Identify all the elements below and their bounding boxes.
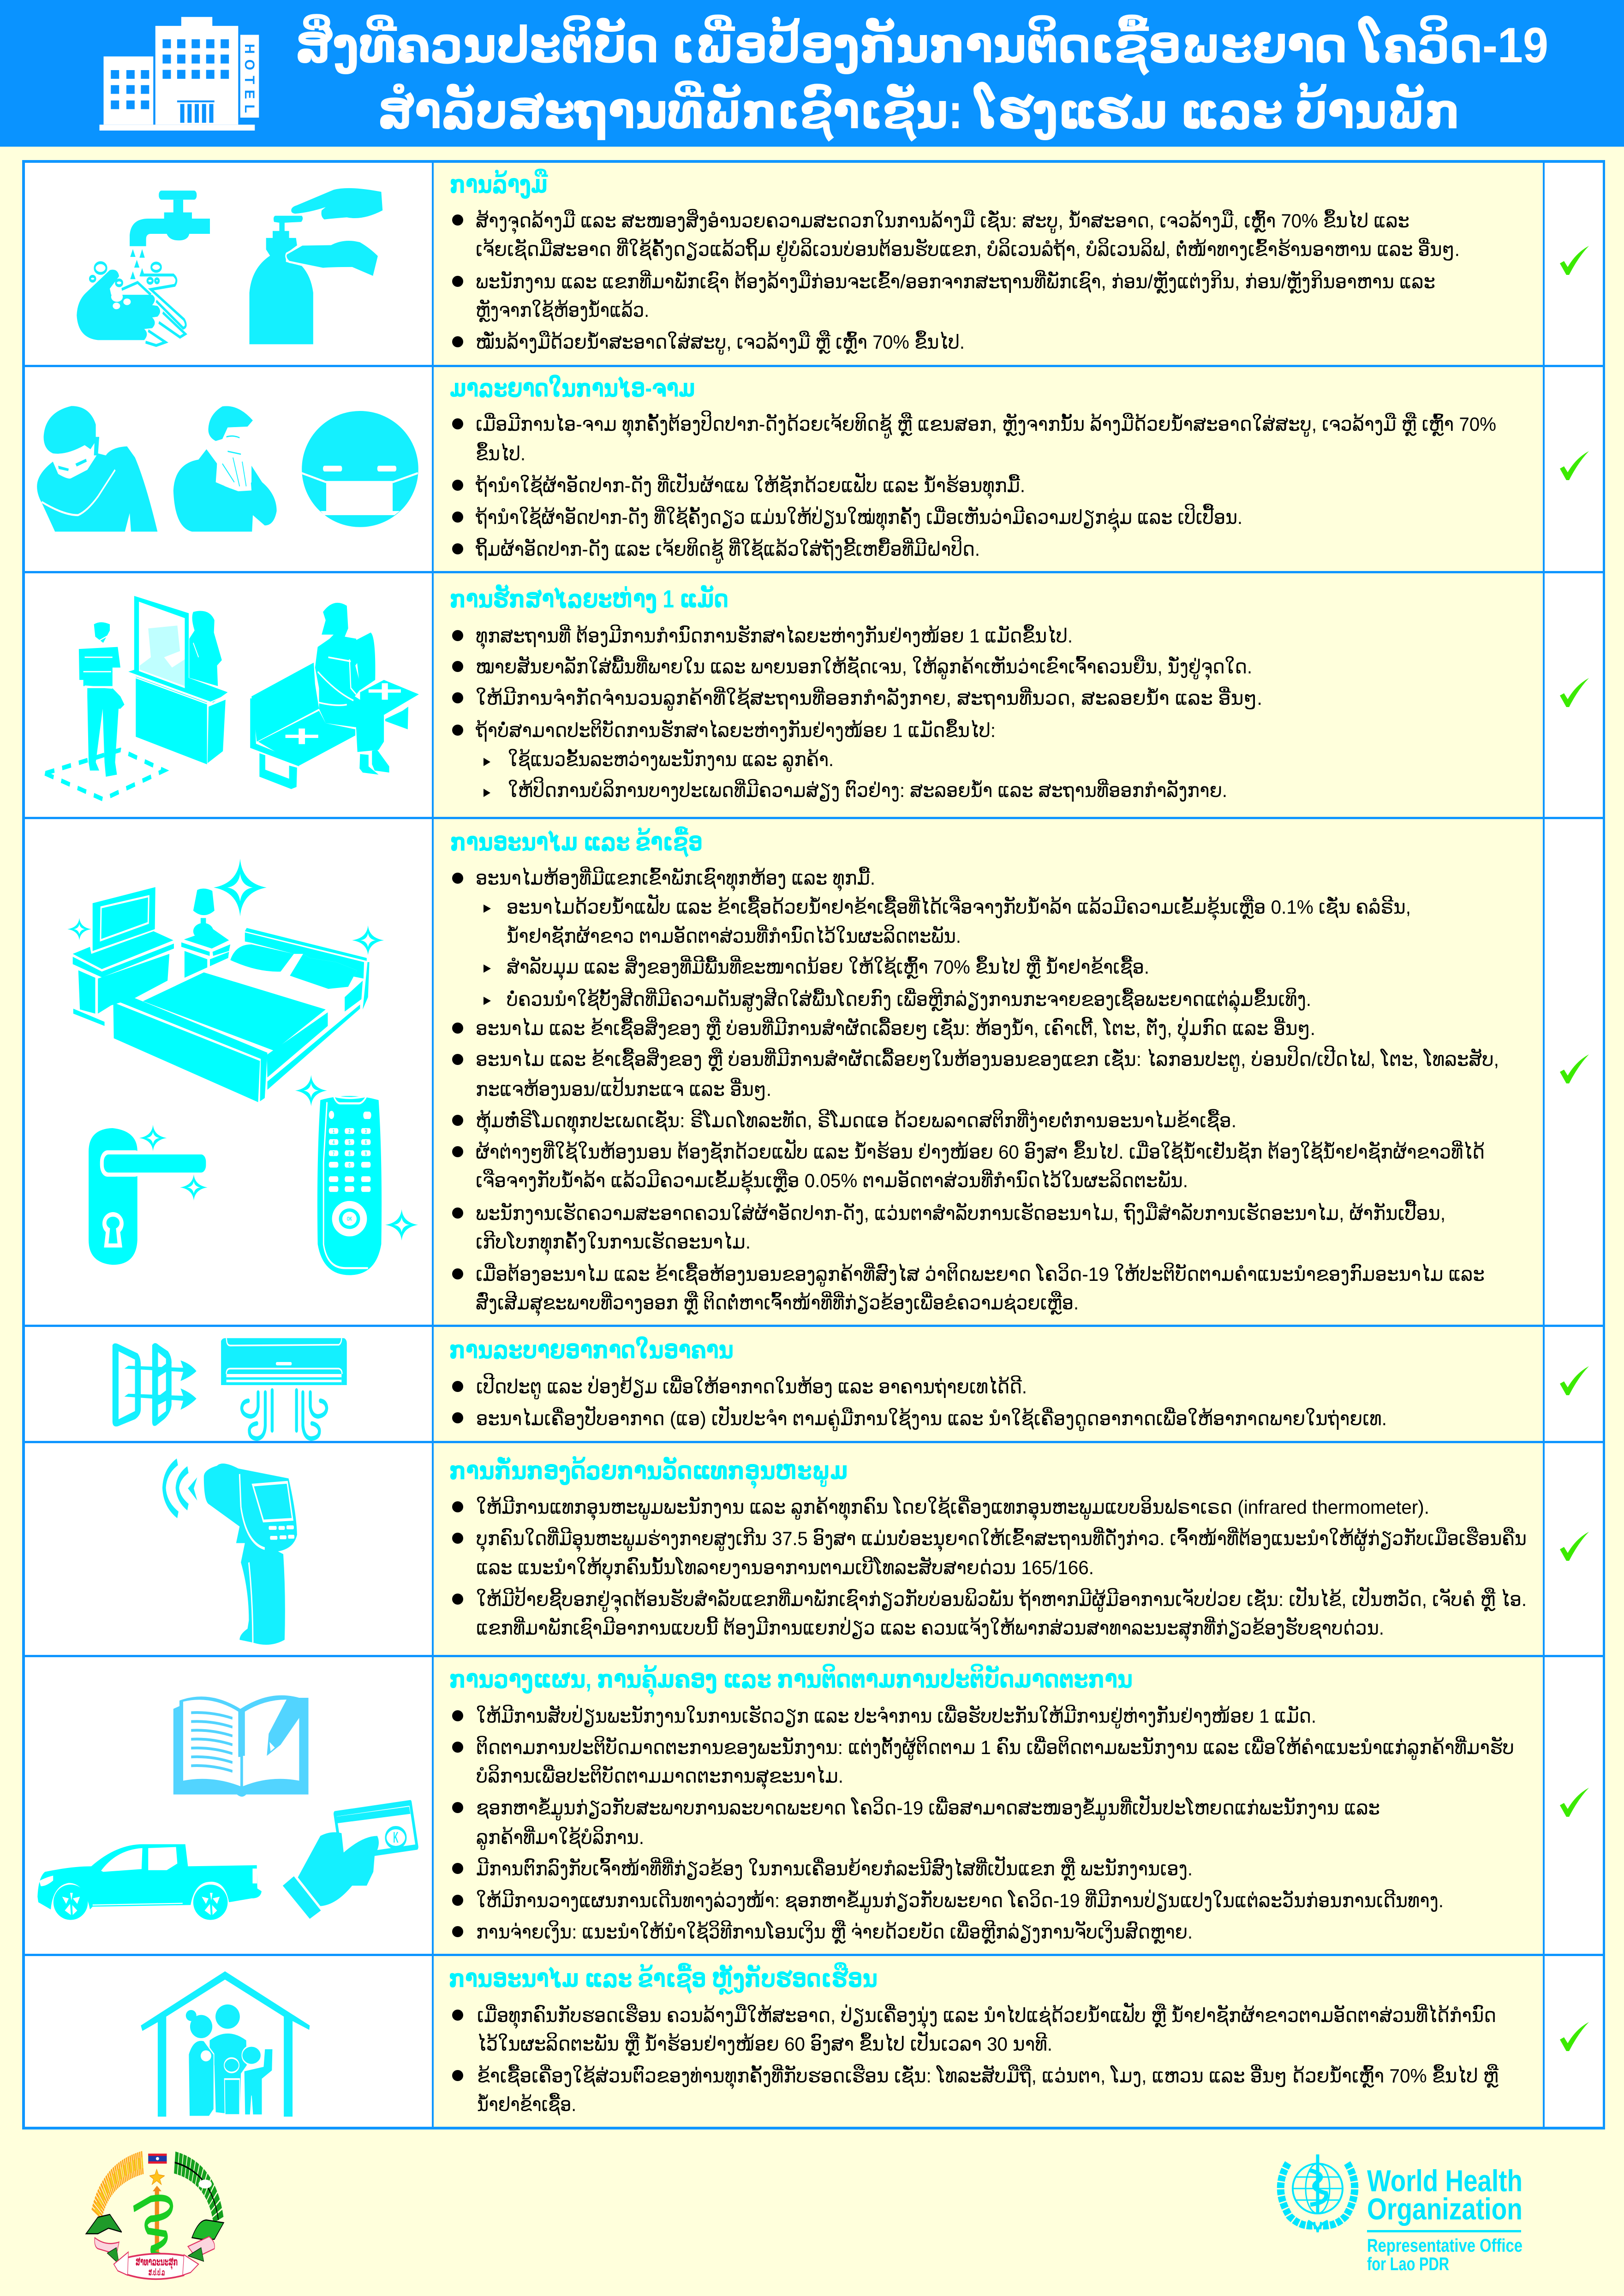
icon: check mark — [1560, 1788, 1589, 1817]
text block: ຖ້ານຳໃຊ້ຜ້າອັດປາກ-ດັງ ທີ່ເປັນຜ້າແພ ໃຫ້ຊັກດ້ວຍແຟັບ ແລະ ນ້ຳຮ້ອນທຸກມື້. — [475, 472, 1025, 500]
text block: ບໍລິການເພື່ອປະຕິບັດຕາມມາດຕະການສຸຂະນາໄມ. — [476, 1764, 843, 1790]
panel: cleaning and disinfection — [67, 827, 1589, 1317]
text: organisation name: Organization — [1367, 2192, 1522, 2226]
icon: check mark — [1560, 2022, 1589, 2051]
text block: ບໍ່ຄວນນຳໃຊ້ບັ້ງສີດທີ່ມີຄວາມດັນສູງສີດໃສ່ພື້ນໂດຍກົງ ເພື່ອຫຼີກລ່ຽງການກະຈາຍຂອງເຊື້ອພະຍາດແຕ່ລຸ່ມຂຶ້ນເທິງ. — [507, 987, 1311, 1013]
icon: book, pickup truck, card payment: K — [393, 1828, 399, 1846]
text block: ແຂກທີ່ມາພັກເຊົາມີອາການແບບນີ້ ຕ້ອງມີການແຍກປ່ຽວ ແລະ ຄວນແຈ້ງໃຫ້ພາກສ່ວນສາທາລະນະສຸກທີ່ກ່ຽວຂ້ອງຮັບຊາບດ່ວນ. — [476, 1617, 1384, 1642]
icon: family in house — [141, 1971, 310, 2117]
icon: check mark — [1560, 246, 1589, 275]
logo: World Health Organization — [1281, 2154, 1522, 2274]
text block: ເຈືອຈາງກັບນ້ຳລ້າ ແລ້ວມີຄວາມເຂັ້ມຂຸ້ນເຫຼືອ 0.05% ຕາມອັດຕາສ່ວນທີ່ກຳນົດໄວ້ໃນຜະລິດຕະພັນ. — [476, 1169, 1188, 1195]
icon: check mark — [1560, 451, 1589, 480]
icon: bed, door handle, remote: 5 — [348, 1140, 351, 1146]
panel: planning and monitoring — [37, 1664, 1589, 1944]
icon: infrared thermometer — [164, 1462, 297, 1645]
text block: ອະນາໄມ ແລະ ຂ້າເຊື້ອສິ່ງຂອງ ຫຼື ບ່ອນທີ່ມີການສຳຜັດເລື້ອຍໆໃນຫ້ອງນອນຂອງແຂກ ເຊັ່ນ: ໄລກອນປະຕູ, ບ່ອນປິດ/ເປີດໄຟ, ໂຕະ, ໂທລະສັບ, — [476, 1046, 1499, 1072]
text block: ໝາຍສັນຍາລັກໃສ່ພື້ນທີ່ພາຍໃນ ແລະ ພາຍນອກໃຫ້ຊັດເຈນ, ໃຫ້ລູກຄ້າເຫັນວ່າເຂົາເຈົ້າຄວນຍືນ, ນັ່ງຢູ່ຈຸດໃດ. — [476, 655, 1252, 681]
logo: Lao Ministry of Health emblem: ສາທາລະນະສຸກ — [136, 2255, 178, 2270]
text block: ກະແຈຫ້ອງນອນ/ແປ້ນກະແຈ ແລະ ອື່ນໆ. — [476, 1077, 771, 1100]
icon: bed, door handle, remote: OK — [347, 1216, 352, 1222]
icon: bed, door handle, remote: 6 — [365, 1140, 367, 1146]
text block: ເມື່ອມີການໄອ-ຈາມ ທຸກຄັ້ງຕ້ອງປິດປາກ-ດັງດ້ວຍເຈ້ຍທິດຊູ້ ຫຼື ແຂນສອກ, ຫຼັງຈາກນັ້ນ ລ້າງມືດ້ວຍນ້ຳສະອາດໃສ່ສະບູ, ເຈວລ້າງມື ຫຼື ເຫຼົ້າ 70% — [476, 410, 1496, 439]
icon: check mark — [1560, 678, 1589, 707]
text block — [452, 410, 1496, 564]
icon: bed, door handle, remote: 3 — [365, 1129, 367, 1135]
text block: ໝັ່ນລ້າງມືດ້ວຍນ້ຳສະອາດໃສ່ສະບູ, ເຈວລ້າງມື ຫຼື ເຫຼົ້າ 70% ຂຶ້ນໄປ. — [476, 330, 965, 355]
heading: ການຮັກສາໄລຍະຫ່າງ 1 ແມັດ — [450, 584, 728, 613]
text block — [452, 209, 1460, 355]
heading: ມາລະຍາດໃນການໄອ-ຈາມ — [450, 375, 695, 402]
text block: ຖ້າບໍ່ສາມາດປະຕິບັດການຮັກສາໄລຍະຫ່າງກັນຢ່າງໜ້ອຍ 1 ແມັດຂຶ້ນໄປ: — [475, 719, 996, 742]
text block: ຂ້າເຊື້ອເຄື່ອງໃຊ້ສ່ວນຕົວຂອງທ່ານທຸກຄັ້ງທີ່ກັບຮອດເຮືອນ ເຊັ່ນ: ໂທລະສັບມືຖື, ແວ່ນຕາ, ໂມງ, ແຫວນ ແລະ ອື່ນໆ ດ້ວຍນ້ຳເຫຼົ້າ 70% ຂຶ້ນໄປ ຫຼື — [477, 2064, 1499, 2090]
panel: cleaning after returning home — [141, 1963, 1589, 2117]
icon: check mark — [1560, 1532, 1589, 1561]
panel: cough etiquette — [37, 375, 1589, 564]
text block: ບຸກຄົນໃດທີ່ມີອຸນຫະພູມຮ່າງກາຍສູງເກີນ 37.5 ອົງສາ ແມ່ນບໍ່ອະນຸຍາດໃຫ້ເຂົ້າສະຖານທີ່ດັ່ງກ່າວ. ເຈົ້າໜ້າທີ່ຕ້ອງແນະນຳໃຫ້ຜູ້ກ່ຽວກັບເມືອເຮືອນຄືນ — [476, 1527, 1527, 1552]
icon: distancing at counter and bench — [45, 596, 419, 799]
panel: physical distance — [45, 584, 1589, 802]
text block: ພະນັກງານ ແລະ ແຂກທີ່ມາພັກເຊົາ ຕ້ອງລ້າງມືກ່ອນຈະເຂົ້າ/ອອກຈາກສະຖານທີ່ພັກເຊົາ, ກ່ອນ/ຫຼັງແຕ່ງກິນ, ກ່ອນ/ຫຼັງກິນອາຫານ ແລະ — [476, 270, 1435, 294]
text: organisation name: for Lao PDR — [1367, 2254, 1449, 2274]
text block — [452, 2002, 1499, 2116]
icon: hotel building — [100, 17, 259, 131]
icon: tap and soap — [77, 188, 382, 345]
text block — [452, 1373, 1387, 1431]
text block: ອະນາໄມດ້ວຍນ້ຳແຟັບ ແລະ ຂ້າເຊື້ອດ້ວຍນ້ຳຢາຂ້າເຊື້ອທີ່ໄດ້ເຈືອຈາງກັບນ້ຳລ້າ ແລ້ວມີຄວາມເຂັ້ມຂຸ້ນເຫຼືອ 0.1% ເຊັ່ນ ຄລໍຣີນ, — [507, 894, 1411, 921]
text block: ອະນາໄມເຄື່ອງປັບອາກາດ (ແອ) ເປັນປະຈຳ ຕາມຄູ່ມືການໃຊ້ງານ ແລະ ນຳໃຊ້ເຄື່ອງດູດອາກາດເພື່ອໃຫ້ອາກາດພາຍໃນຖ່າຍເທ. — [476, 1405, 1387, 1431]
panel: ventilation — [113, 1336, 1589, 1439]
icon: bed, door handle, remote: 2 — [348, 1129, 351, 1135]
heading: ການລ້າງມື — [450, 169, 548, 199]
text block: ຫຼັງຈາກໃຊ້ຫ້ອງນ້ຳແລ້ວ. — [476, 299, 649, 322]
text block: ລູກຄ້າທີ່ມາໃຊ້ບໍລິການ. — [476, 1826, 644, 1850]
text block: ອະນາໄມຫ້ອງທີ່ມີແຂກເຂົ້າພັກເຊົາທຸກຫ້ອງ ແລະ ທຸກມື້. — [476, 867, 875, 892]
icon: book, pickup truck, card payment — [37, 1695, 417, 1920]
icon: coughing, sneezing, mask — [37, 406, 418, 532]
text block — [452, 1496, 1527, 1642]
heading: ການອະນາໄມ ແລະ ຂ້າເຊື້ອ — [450, 827, 703, 857]
icon: bed, door handle, remote: 8 — [348, 1151, 351, 1157]
title: ສຳລັບສະຖານທີ່ພັກເຊົາເຊັ່ນ: ໂຮງແຮມ ແລະ ບ້ານພັກ — [378, 80, 1460, 142]
text block: ໃຫ້ມີປ້າຍຊີ້ບອກຢູ່ຈຸດຕ້ອນຮັບສຳລັບແຂກທີ່ມາພັກເຊົາກ່ຽວກັບບ່ອນພິວພັນ ຖ້າຫາກມີຜູ້ມີອາການເຈັບປ່ວຍ ເຊັ່ນ: ເປັນໄຂ້, ເປັນຫວັດ, ເຈັບຄໍ ຫຼື ໄອ. — [476, 1586, 1527, 1613]
icon: check mark — [1560, 1366, 1589, 1395]
text block: ໄວ້ໃນຜະລິດຕະພັນ ຫຼື ນ້ຳຮ້ອນຢ່າງໜ້ອຍ 60 ອົງສາ ຂຶ້ນໄປ ເປັນເວລາ 30 ນາທີ. — [477, 2031, 1052, 2056]
text block: ໃຫ້ມີການຈຳກັດຈຳນວນລູກຄ້າທີ່ໃຊ້ສະຖານທີ່ອອກກຳລັງກາຍ, ສະຖານທີ່ນວດ, ສະລອຍນ້ຳ ແລະ ອື່ນໆ. — [476, 687, 1262, 711]
text block: ເປີດປະຕູ ແລະ ປ່ອງຢ້ຽມ ເພື່ອໃຫ້ອາກາດໃນຫ້ອງ ແລະ ອາຄານຖ່າຍເທໄດ້ດີ. — [476, 1373, 1027, 1399]
panel: hand washing — [77, 169, 1589, 355]
text block: ການຈ່າຍເງິນ: ແນະນຳໃຫ້ນຳໃຊ້ວິທີການໂອນເງິນ ຫຼື ຈ່າຍດ້ວຍບັດ ເພື່ອຫຼີກລ່ຽງການຈັບເງິນສົດຫຼາຍ. — [476, 1920, 1193, 1944]
text block: ສົ່ງເສີມສຸຂະພາບທີ່ວາງອອກ ຫຼື ຕິດຕໍ່ຫາເຈົ້າໜ້າທີ່ທີ່ກ່ຽວຂ້ອງເພື່ອຂໍຄວາມຊ່ວຍເຫຼືອ. — [476, 1291, 1079, 1317]
text: organisation name: World Health — [1367, 2164, 1522, 2198]
title: ສິ່ງທີ່ຄວນປະຕິບັດ ເພື່ອປ້ອງກັນການຕິດເຊື້ອພະຍາດ ໂຄວິດ-19 — [295, 13, 1548, 76]
text block: ນ້ຳຢາຊັກຜ້າຂາວ ຕາມອັດຕາສ່ວນທີ່ກຳນົດໄວ້ໃນຜະລິດຕະພັນ. — [507, 924, 961, 947]
text block: ສ້າງຈຸດລ້າງມື ແລະ ສະໜອງສິ່ງອຳນວຍຄວາມສະດວກໃນການລ້າງມື ເຊັ່ນ: ສະບູ, ນ້ຳສະອາດ, ເຈວລ້າງມື, ເຫຼົ້າ 70% ຂຶ້ນໄປ ແລະ — [476, 209, 1409, 235]
logo: Lao Ministry of Health emblem: ສ.ປ.ປ.ລ — [149, 2267, 165, 2278]
icon: bed, door handle, remote: 7 — [333, 1151, 334, 1157]
text block: ຖິ້ມຜ້າອັດປາກ-ດັງ ແລະ ເຈ້ຍທິດຊູ້ ທີ່ໃຊ້ແລ້ວໃສ່ຖັງຂີ້ເຫຍື້ອທີ່ມີຝາປິດ. — [475, 535, 980, 564]
text block: ແລະ ແນະນຳໃຫ້ບຸກຄົນນັ້ນໂທລາຍງານອາການຕາມເບີໂທລະສັບສາຍດ່ວນ 165/166. — [476, 1556, 1094, 1582]
text block: ອະນາໄມ ແລະ ຂ້າເຊື້ອສິ່ງຂອງ ຫຼື ບ່ອນທີ່ມີການສຳຜັດເລື້ອຍໆ ເຊັ່ນ: ຫ້ອງນ້ຳ, ເຄົາເຕີ້, ໂຕະ, ຕັ່ງ, ປຸ່ມກົດ ແລະ ອື່ນໆ. — [476, 1017, 1315, 1042]
text block — [452, 625, 1262, 802]
heading: ການວາງແຜນ, ການຄຸ້ມຄອງ ແລະ ການຕິດຕາມການປະຕິບັດມາດຕະການ — [449, 1664, 1133, 1697]
text: organisation name: Representative Office — [1367, 2236, 1522, 2256]
text block: ໃຫ້ມີການແທກອຸນຫະພູມພະນັກງານ ແລະ ລູກຄ້າທຸກຄົນ ໂດຍໃຊ້ເຄື່ອງແທກອຸນຫະພູມແບບອິນຟຣາເຣດ (infrared thermometer). — [476, 1496, 1429, 1521]
header banner — [0, 0, 1624, 147]
heading: ການອະນາໄມ ແລະ ຂ້າເຊື້ອ ຫຼັງກັບຮອດເຮືອນ — [449, 1963, 878, 1995]
heading: ການລະບາຍອາກາດໃນອາຄານ — [449, 1336, 734, 1364]
text block: ເມື່ອຕ້ອງອະນາໄມ ແລະ ຂ້າເຊື້ອຫ້ອງນອນຂອງລູກຄ້າທີ່ສົງໄສ ວ່າຕິດພະຍາດ ໂຄວິດ-19 ໃຫ້ປະຕິບັດຕາມຄຳແນະນຳຂອງກົມອະນາໄມ ແລະ — [476, 1263, 1485, 1287]
text block: ເຈ້ຍເຊັດມືສະອາດ ທີ່ໃຊ້ຄັ້ງດຽວແລ້ວຖິ້ມ ຢູ່ບໍລິເວນບ່ອນຕ້ອນຮັບແຂກ, ບໍລິເວນລໍຖ້າ, ບໍລິເວນລິຟ, ຕໍ່ໜ້າທາງເຂົ້າຮ້ານອາຫານ ແລະ ອື່ນໆ. — [476, 238, 1460, 262]
icon: hotel building: HOTEL — [242, 44, 257, 113]
logo: Lao Ministry of Health emblem — [86, 2153, 224, 2279]
icon: bed, door handle, remote: 0 — [348, 1162, 351, 1168]
icon: bed, door handle, remote — [67, 859, 418, 1275]
text block: ຫຸ້ມຫໍ່ຣີໂມດທຸກປະເພດເຊັ່ນ: ຣີໂມດໂທລະທັດ, ຣີໂມດແອ ດ້ວຍພລາດສຕິກທີ່ງ່າຍຕໍ່ການອະນາໄມຂ້າເຊື້ອ. — [476, 1109, 1236, 1135]
text block: ຊອກຫາຂໍ້ມູນກ່ຽວກັບສະພາບການລະບາດພະຍາດ ໂຄວິດ-19 ເພື່ອສາມາດສະໜອງຂໍ້ມູນທີ່ເປັນປະໂຫຍດແກ່ພະນັກງານ ແລະ — [476, 1795, 1380, 1820]
text: organisation name — [1367, 2164, 1522, 2274]
panel: temperature screening — [164, 1457, 1589, 1645]
icon: bed, door handle, remote: 4 — [333, 1140, 335, 1146]
text block: ນ້ຳຢາຂ້າເຊື້ອ. — [477, 2093, 576, 2116]
icon: bed, door handle, remote: 1 — [333, 1129, 335, 1135]
text block: ສຳລັບມຸມ ແລະ ສິ່ງຂອງທີ່ມີພື້ນທີ່ຂະໜາດນ້ອຍ ໃຫ້ໃຊ້ເຫຼົ້າ 70% ຂຶ້ນໄປ ຫຼື ນ້ຳຢາຂ້າເຊື້ອ. — [507, 955, 1149, 981]
text block: ທຸກສະຖານທີ່ ຕ້ອງມີການກຳນົດການຮັກສາໄລຍະຫ່າງກັນຢ່າງໜ້ອຍ 1 ແມັດຂຶ້ນໄປ. — [476, 625, 1073, 650]
text block: ຜ້າຕ່າງໆທີ່ໃຊ້ໃນຫ້ອງນອນ ຕ້ອງຊັກດ້ວຍແຟັບ ແລະ ນ້ຳຮ້ອນ ຢ່າງໜ້ອຍ 60 ອົງສາ ຂຶ້ນໄປ. ເມື່ອໃຊ້ນ້ຳເຢັນຊັກ ຕ້ອງໃຊ້ນ້ຳຢາຊັກຜ້າຂາວທີ່ໄດ້ — [476, 1139, 1485, 1163]
text block: ຂຶ້ນໄປ. — [476, 442, 525, 464]
icon: bed, door handle, remote: 9 — [365, 1151, 367, 1157]
text block: ໃຫ້ມີການສັບປ່ຽນພະນັກງານໃນການເຮັດວຽກ ແລະ ປະຈຳການ ເພື່ອຮັບປະກັນໃຫ້ມີການຢູ່ຫ່າງກັນຢ່າງໜ້ອຍ 1 ແມັດ. — [476, 1705, 1316, 1729]
text block: ໃຊ້ແນວຂັ້ນລະຫວ່າງພະນັກງານ ແລະ ລູກຄ້າ. — [508, 749, 834, 772]
text block: ຖ້ານຳໃຊ້ຜ້າອັດປາກ-ດັງ ທີ່ໃຊ້ຄັ້ງດຽວ ແມ່ນໃຫ້ປ່ຽນໃໝ່ທຸກຄັ້ງ ເມື່ອເຫັນວ່າມີຄວາມປຽກຊຸ່ມ ແລະ ເປິເປື້ອນ. — [475, 504, 1242, 533]
icon: window and air conditioner — [113, 1338, 347, 1439]
text block — [452, 867, 1499, 1317]
icon: check mark — [1560, 1054, 1589, 1083]
icon: WHO emblem — [1281, 2154, 1355, 2232]
text block: ຕິດຕາມການປະຕິບັດມາດຕະການຂອງພະນັກງານ: ແຕ່ງຕັ້ງຜູ້ຕິດຕາມ 1 ຄົນ ເພື່ອຕິດຕາມພະນັກງານ ແລະ ເພື່ອໃຫ້ຄຳແນະນຳແກ່ລູກຄ້າທີ່ມາຮັບ — [476, 1736, 1514, 1760]
heading: ການກັ່ນກອງດ້ວຍການວັດແທກອຸນຫະພູມ — [449, 1457, 848, 1489]
text block — [452, 1705, 1514, 1944]
text block: ເມື່ອທຸກຄົນກັບຮອດເຮືອນ ຄວນລ້າງມືໃຫ້ສະອາດ, ປ່ຽນເຄື່ອງນຸ່ງ ແລະ ນຳໄປແຊ່ດ້ວຍນ້ຳແຟັບ ຫຼື ນ້ຳຢາຊັກຜ້າຂາວຕາມອັດຕາສ່ວນທີ່ໄດ້ກຳນົດ — [477, 2002, 1496, 2029]
text block: ໃຫ້ມີການວາງແຜນການເດີນທາງລ່ວງໜ້າ: ຊອກຫາຂໍ້ມູນກ່ຽວກັບພະຍາດ ໂຄວິດ-19 ທີ່ມີການປ່ຽນແປງໃນແຕ່ລະວັນກ່ອນການເດີນທາງ. — [476, 1889, 1444, 1913]
text block: ມີການຕົກລົງກັບເຈົ້າໜ້າທີ່ທີ່ກ່ຽວຂ້ອງ ໃນການເຄື່ອນຍ້າຍກໍລະນີສົງໄສທີ່ເປັນແຂກ ຫຼື ພະນັກງານເອງ. — [476, 1856, 1193, 1881]
text block: ເກີບໂບກທຸກຄັ້ງໃນການເຮັດອະນາໄມ. — [476, 1231, 751, 1256]
text block: ໃຫ້ປິດການບໍລິການບາງປະເພດທີ່ມີຄວາມສ່ຽງ ຕົວຢ່າງ: ສະລອຍນ້ຳ ແລະ ສະຖານທີ່ອອກກຳລັງກາຍ. — [508, 777, 1227, 802]
title — [295, 13, 1548, 142]
text block: ພະນັກງານເຮັດຄວາມສະອາດຄວນໃສ່ຜ້າອັດປາກ-ດັງ, ແວ່ນຕາສຳລັບການເຮັດອະນາໄມ, ຖົງມືສຳລັບການເຮັດອະນາໄມ, ຜ້າກັນເປື້ອນ, — [476, 1200, 1445, 1225]
